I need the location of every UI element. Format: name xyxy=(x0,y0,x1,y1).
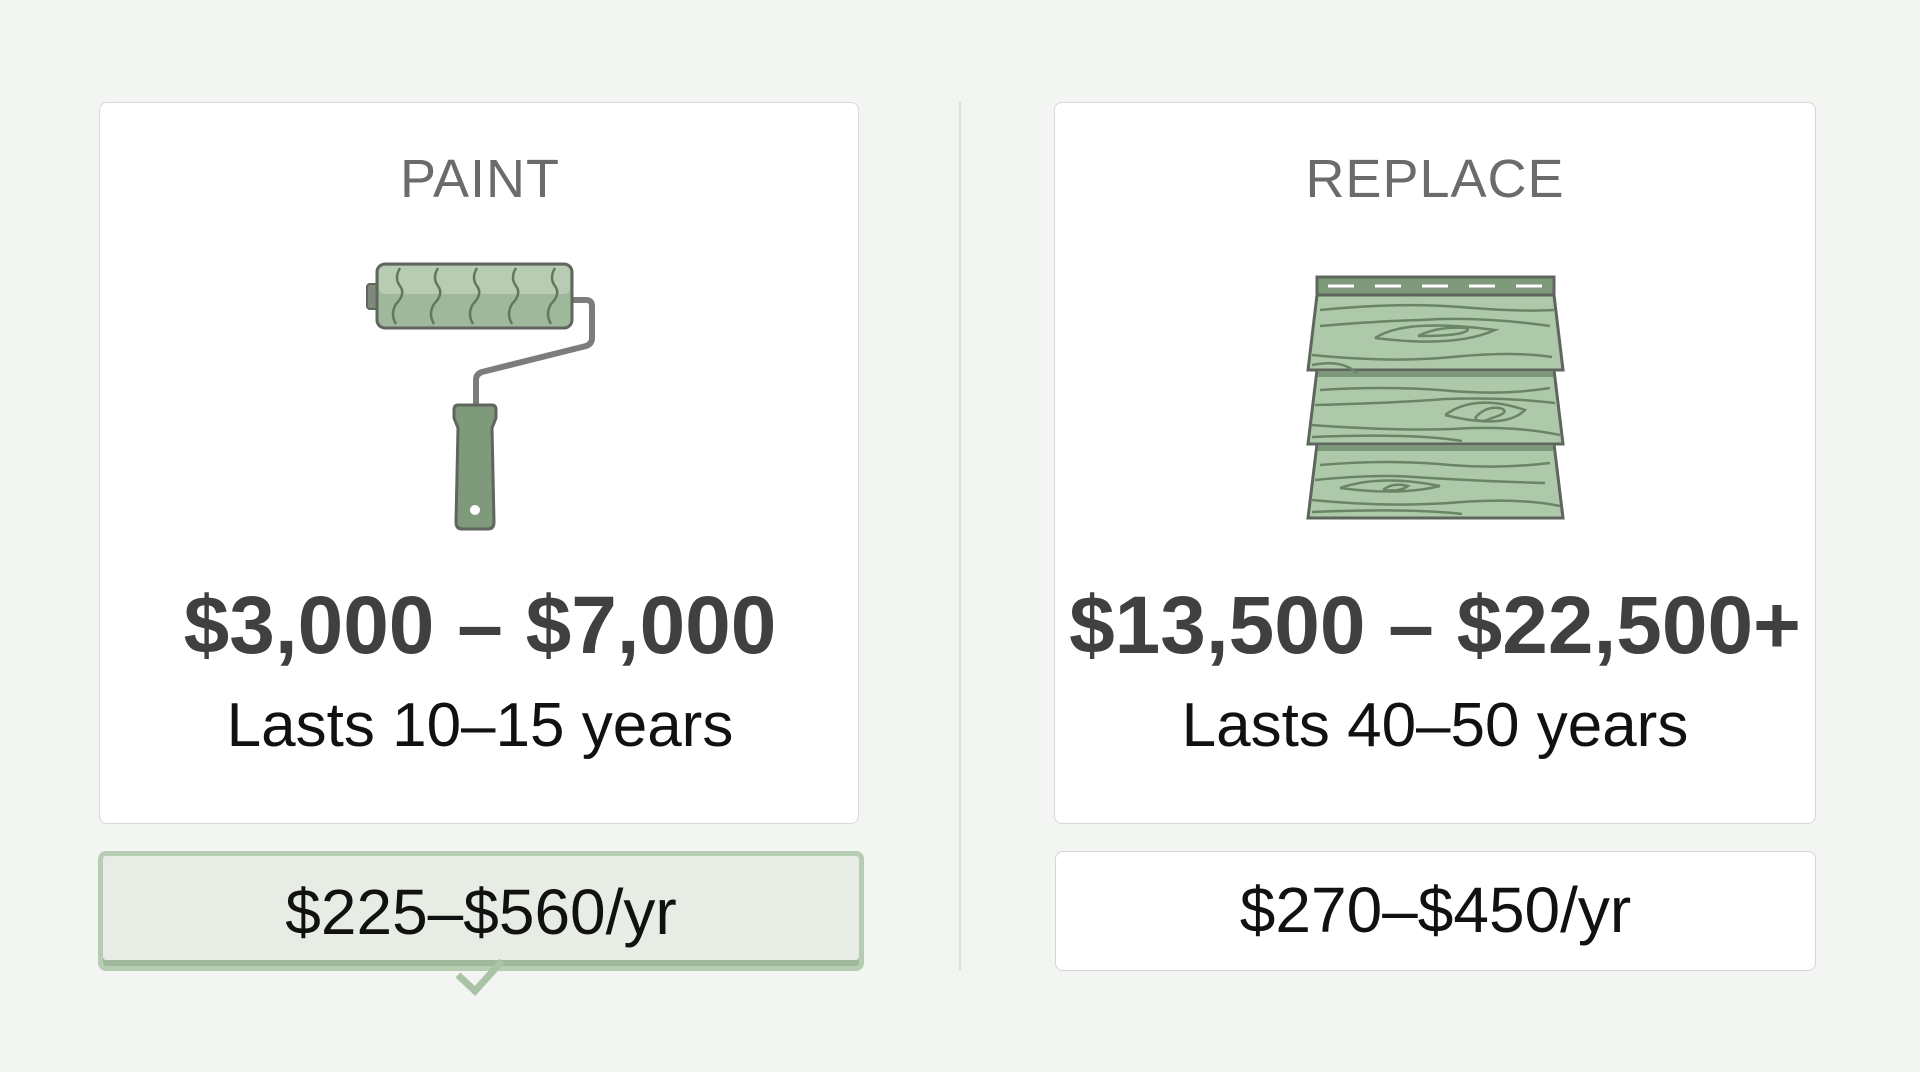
annual cost: replace: $270–$450/yr xyxy=(1240,874,1631,946)
price: replace: $13,500 – $22,500+ xyxy=(1069,580,1801,671)
annual cost: replace xyxy=(1055,851,1816,971)
icon: paint roller xyxy=(366,262,595,530)
icon: siding boards xyxy=(1306,276,1565,520)
lifespan: replace: Lasts 40–50 years xyxy=(1182,691,1688,760)
heading: replace: REPLACE xyxy=(1305,149,1565,209)
panel: paint xyxy=(99,102,859,824)
price: paint: $3,000 – $7,000 xyxy=(184,580,776,671)
heading: paint: PAINT xyxy=(400,149,560,209)
annual cost: paint (highlighted) xyxy=(98,851,864,971)
lifespan: paint: Lasts 10–15 years xyxy=(227,691,733,760)
panel: replace xyxy=(1054,102,1816,824)
icon: checkmark xyxy=(456,958,504,996)
divider xyxy=(959,102,961,970)
annual cost: paint (highlighted): $225–$560/yr xyxy=(285,876,677,948)
